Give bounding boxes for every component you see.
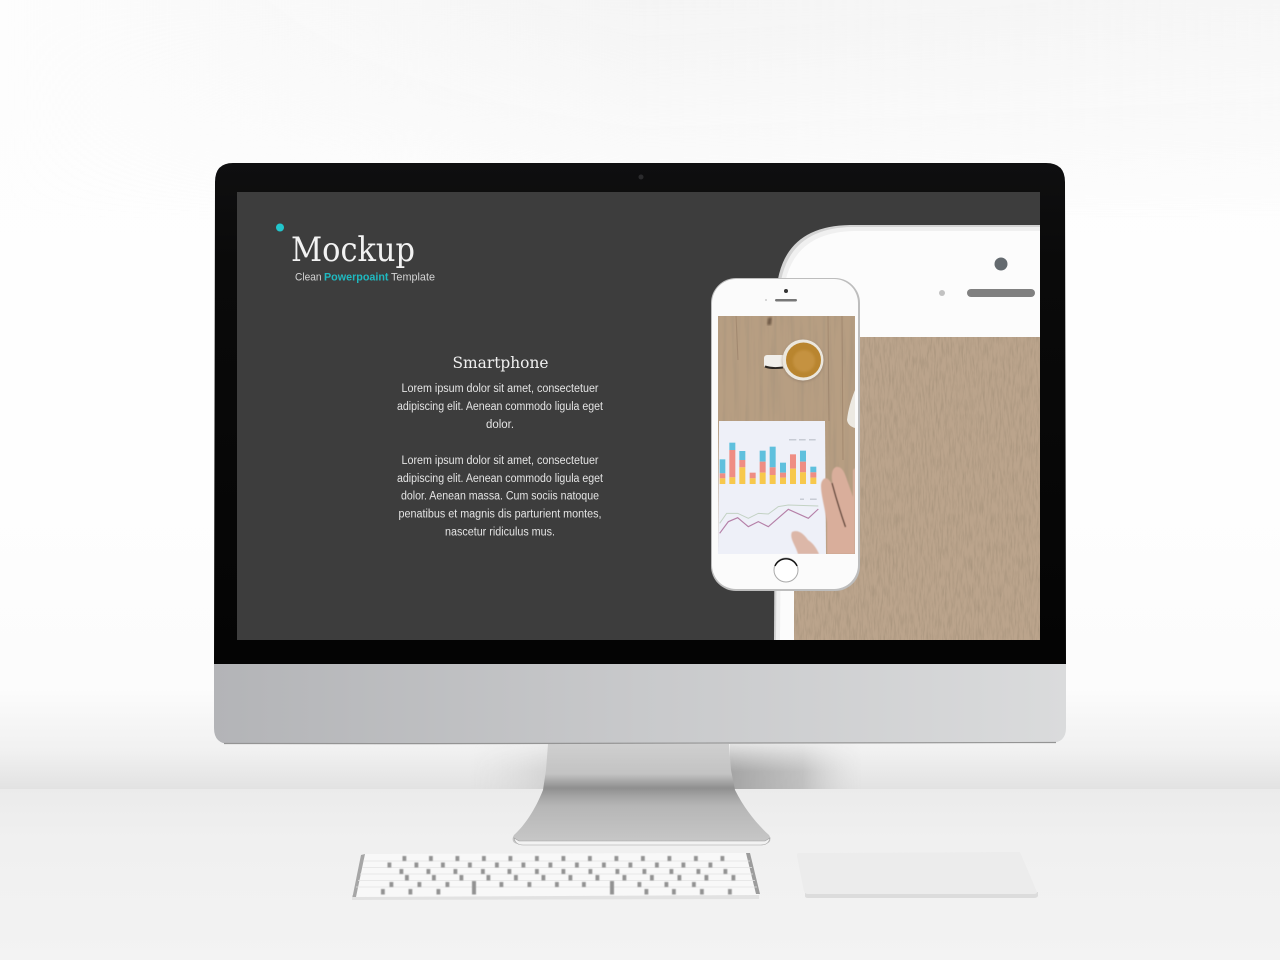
stacked bar chart (720, 439, 818, 533)
body text block two: Lorem ipsum dolor sit amet, consectetuer (402, 455, 599, 467)
body text block one: Lorem ipsum dolor sit amet, consectetuer (402, 383, 599, 395)
phone speaker (775, 299, 797, 302)
accent dot (276, 224, 284, 232)
large phone speaker (967, 289, 1035, 297)
large phone camera (994, 258, 1008, 270)
stand shadow on wall (510, 744, 842, 789)
large phone sensor (939, 290, 945, 296)
paper with charts (718, 421, 826, 554)
chart legends (789, 439, 817, 500)
desk surface (0, 789, 1280, 960)
trackpad (797, 852, 1038, 898)
body text block two: adipiscing elit. Aenean commodo ligula eget (397, 473, 604, 485)
mouse (847, 390, 855, 428)
slide screen (237, 192, 1040, 640)
phone body (711, 278, 860, 591)
title: Mockup (291, 230, 415, 270)
body text block one (397, 383, 604, 431)
line chart (720, 505, 818, 533)
large phone crop (774, 225, 1040, 640)
subtitle: Clean (295, 272, 322, 284)
large phone wood screen (794, 337, 1040, 640)
phone home button (774, 558, 798, 582)
body text block two: dolor. Aenean massa. Cum sociis natoque (401, 490, 599, 502)
monitor stand (513, 744, 770, 845)
subtitle (295, 272, 435, 284)
body text block one: adipiscing elit. Aenean commodo ligula eget (397, 401, 604, 413)
body text block two: penatibus et magnis dis parturient montes, (398, 508, 602, 520)
body text block two (397, 455, 604, 538)
phone sensor (765, 299, 767, 301)
section heading: Smartphone: Smartphone (452, 353, 548, 372)
wall upper tint (535, 0, 1086, 39)
coffee cup (764, 340, 824, 382)
subtitle: Powerpoaint (324, 272, 389, 284)
small phone (711, 278, 860, 591)
keyboard (352, 853, 760, 900)
key gaps (356, 861, 757, 887)
body text block two: nascetur ridiculus mus. (445, 526, 555, 538)
body text block one: dolor. (486, 419, 514, 431)
phone screen photo (718, 316, 855, 554)
subtitle: Template (391, 272, 435, 284)
hand (791, 467, 855, 554)
monitor bezel (214, 163, 1066, 664)
phone camera (784, 289, 788, 293)
wood desk (718, 316, 855, 554)
monitor body (214, 163, 1066, 744)
webcam (638, 174, 644, 180)
monitor chin (214, 660, 1066, 744)
